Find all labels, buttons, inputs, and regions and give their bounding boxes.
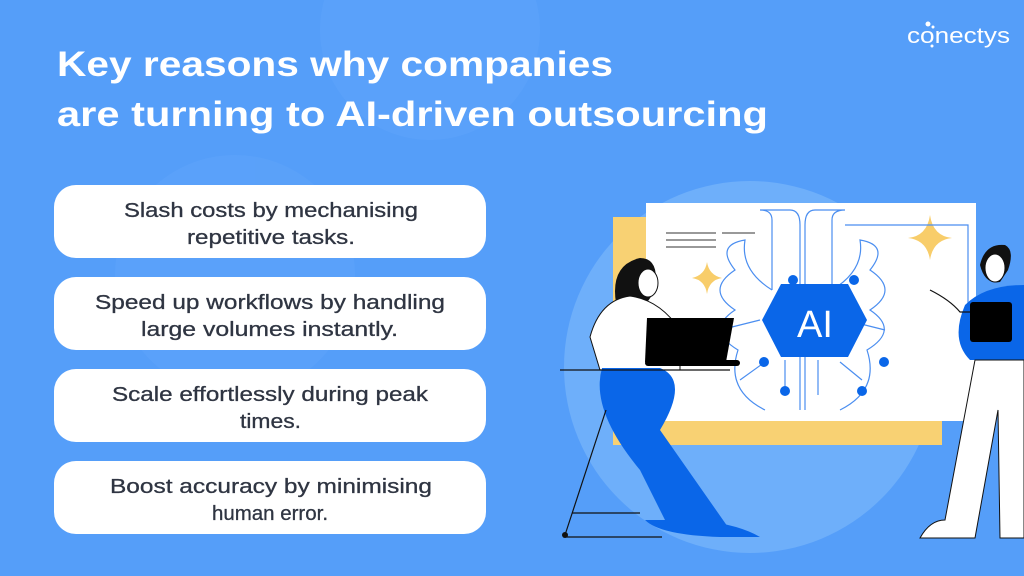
backdrop circle [564, 181, 936, 553]
man [980, 245, 1011, 282]
background decorative shapes [115, 0, 540, 395]
woman [615, 258, 656, 310]
card 2: large volumes instantly. [141, 319, 398, 341]
card 4 [54, 461, 486, 534]
AI hexagon [762, 284, 867, 357]
card 2: Speed up workflows by handling [95, 292, 445, 314]
sparkles [692, 215, 952, 294]
logo: conectys: conectys [907, 23, 1010, 48]
card 3: Scale effortlessly during peak [112, 384, 429, 406]
yellow board back [613, 217, 942, 445]
card 1: repetitive tasks. [187, 227, 355, 249]
card 4: human error. [212, 503, 328, 525]
whiteboard [646, 203, 976, 421]
title: are turning to AI-driven outsourcing [57, 95, 768, 134]
title: Key reasons why companies [57, 45, 613, 84]
illustration: AI workplace [560, 181, 1024, 553]
card 4: Boost accuracy by minimising [110, 476, 432, 498]
title [57, 45, 768, 134]
card 3 [54, 369, 486, 442]
illustration: AI workplace: AI [797, 304, 833, 346]
stool & table lines [560, 370, 730, 537]
brain circuit [720, 210, 968, 410]
card 2 [54, 277, 486, 350]
card 1: Slash costs by mechanising [124, 200, 418, 222]
card 3: times. [240, 411, 301, 433]
card 1 [54, 185, 486, 258]
